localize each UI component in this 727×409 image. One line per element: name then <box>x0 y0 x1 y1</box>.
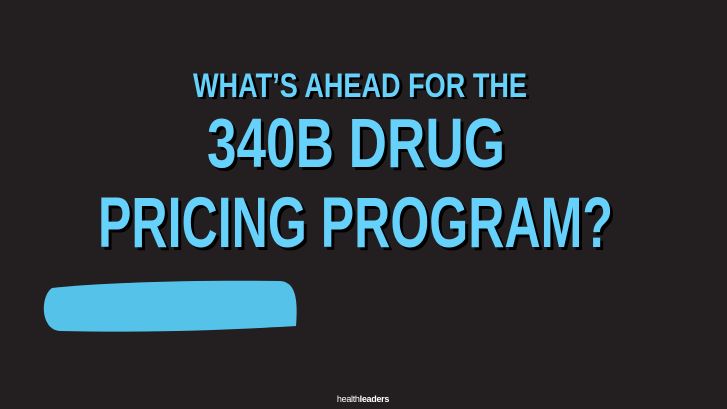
title line 2: 340B DRUG <box>210 107 508 185</box>
title line 1: WHAT’S AHEAD FOR THE <box>193 67 527 105</box>
decorative brush stroke <box>44 281 297 332</box>
title line 1: WHAT’S AHEAD FOR THE <box>196 69 530 107</box>
logo: healthleaders: healthleaders <box>337 394 389 404</box>
title <box>98 67 616 266</box>
title line 2: 340B DRUG <box>207 104 505 182</box>
